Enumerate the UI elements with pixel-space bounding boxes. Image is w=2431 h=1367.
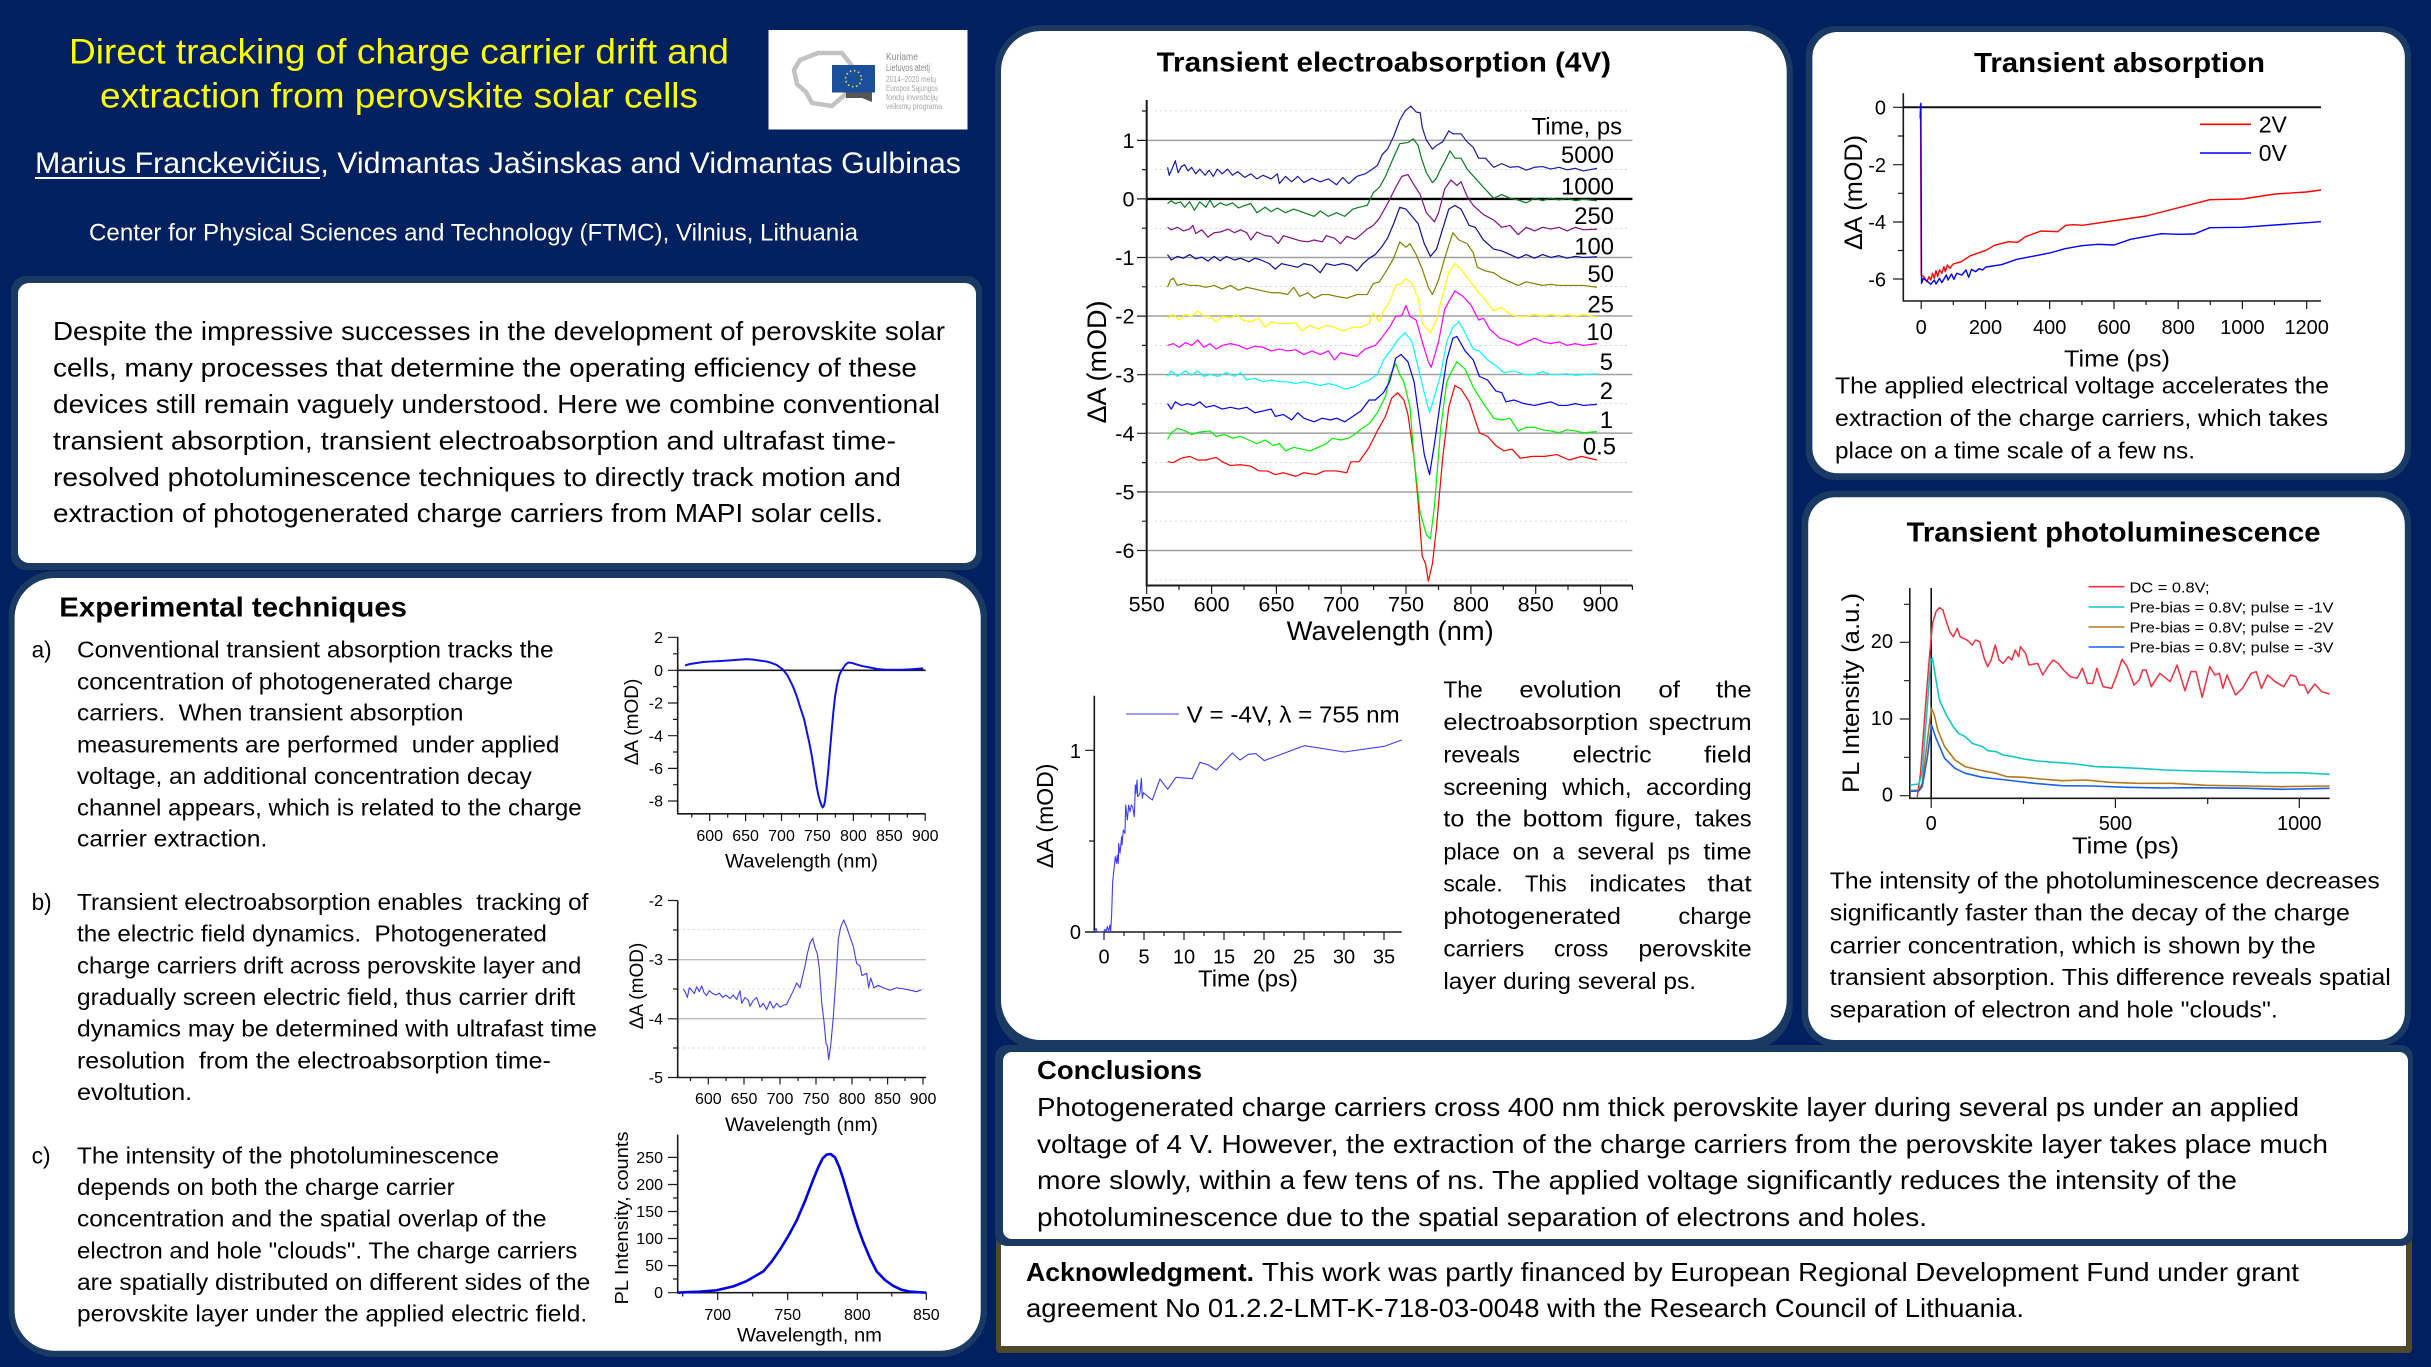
panel: introduction: extraction of photogenerated charge carriers from MAPI solar cells. [53,498,883,528]
panel: transient photoluminescence [1802,491,2411,1046]
chart: transient absorption spectrum: 800 [840,828,867,845]
panel: introduction: Despite the impressive successes in the development of perovskite solar [53,316,945,346]
text block: evolution of electroabsorption: time [1703,838,1752,864]
chart: electroabsorption spectrum: 900 [910,1091,936,1108]
chart: electroabsorption spectra vs time: 0.5 [1583,434,1616,460]
chart: electroabsorption kinetics: 0 [1098,946,1110,968]
chart: electroabsorption kinetics [1032,696,1402,992]
text block: b: gradually screen electric field, thus carrier drift [77,984,576,1010]
chart: transient absorption spectrum: -4 [649,728,663,745]
chart: transient absorption spectrum [622,630,939,873]
chart: electroabsorption spectra vs time: -6 [1115,538,1134,563]
chart: photoluminescence spectrum: PL Intensity, counts [611,1132,632,1304]
chart: photoluminescence kinetics: Pre-bias = 0.8V; pulse = -3V [2130,641,2334,657]
text block: transient absorption note: The applied electrical voltage accelerates the [1835,372,2329,398]
chart: transient absorption kinetics: -6 [1868,270,1886,292]
panel: introduction: resolved photoluminescence techniques to directly track motion and [53,462,901,492]
chart: electroabsorption spectrum: 850 [874,1091,901,1108]
chart: electroabsorption spectra vs time: -4 [1115,421,1134,446]
chart: electroabsorption spectra vs time: 100 [1574,234,1614,260]
chart: electroabsorption kinetics: V = -4V, λ = 755 nm [1187,702,1400,728]
chart: photoluminescence spectrum: 50 [645,1258,663,1275]
title: Direct tracking of charge carrier drift and [69,32,729,72]
affiliation: Center for Physical Sciences and Technology (FTMC), Vilnius, Lithuania [89,220,859,246]
chart: photoluminescence kinetics: 20 [1871,631,1893,653]
chart: electroabsorption spectra vs time: 900 [1582,592,1619,617]
chart: electroabsorption spectra vs time: 10 [1587,319,1613,346]
text block: evolution of electroabsorption: field [1704,741,1752,767]
chart: transient absorption spectrum: 850 [876,828,903,845]
chart: photoluminescence kinetics: 500 [2099,813,2132,835]
text block: evolution of electroabsorption: This [1525,871,1567,897]
text block: evolution of electroabsorption: a [1553,838,1564,864]
chart: electroabsorption spectra vs time: -1 [1115,245,1134,270]
chart: electroabsorption spectra vs time: Time, ps [1532,114,1622,140]
icon: EU funds logo [768,30,968,130]
text block: evolution of electroabsorption: that [1707,871,1752,897]
chart: electroabsorption spectra vs time: 5 [1600,349,1613,376]
chart: electroabsorption spectrum: -5 [649,1070,663,1087]
chart: photoluminescence spectrum [611,1132,940,1347]
text block: a: carrier extraction. [77,826,267,852]
chart: electroabsorption spectra vs time: 50 [1588,261,1614,288]
text block: evolution of electroabsorption: according [1646,774,1752,800]
chart: electroabsorption kinetics: Time (ps) [1198,966,1298,992]
chart: electroabsorption spectra vs time: 550 [1129,592,1165,617]
icon: EU funds logo: Kuriame [886,52,918,63]
chart: photoluminescence kinetics: Time (ps) [2072,832,2179,858]
text block: a: Conventional transient absorption tracks the [77,636,554,662]
chart: electroabsorption spectra vs time: 1 [1122,128,1134,153]
text block: c: are spatially distributed on different sides of the [77,1269,590,1295]
panel: acknowledgment: This work was partly financed by European Regional Development Fund under grant [1262,1257,2300,1287]
chart: photoluminescence kinetics: Pre-bias = 0.8V; pulse = -1V [2130,601,2334,617]
text block: evolution of electroabsorption: of [1658,676,1681,702]
text block: transient absorption note [1835,372,2329,463]
chart: electroabsorption kinetics: 35 [1373,946,1395,968]
chart: transient absorption kinetics: 400 [2033,317,2066,339]
text block: evolution of electroabsorption: bottom [1523,806,1603,832]
chart: electroabsorption spectra vs time: 1000 [1561,174,1614,200]
text block: c: The intensity of the photoluminescence [77,1142,499,1168]
text block: a: channel appears, which is related to the charge [77,795,582,821]
text block: evolution of electroabsorption: on [1513,838,1539,864]
chart: photoluminescence kinetics: Pre-bias = 0.8V; pulse = -2V [2130,621,2334,637]
text block: evolution of electroabsorption: the [1716,676,1752,702]
chart: transient absorption kinetics: 0V [2259,140,2287,166]
chart: electroabsorption spectra vs time: 800 [1453,592,1489,617]
text block: b: Transient electroabsorption enables tracking of [77,889,589,915]
text block: c: perovskite layer under the applied electric field. [77,1301,587,1327]
heading: transient photoluminescence: Transient photoluminescence [1907,517,2321,548]
chart: photoluminescence kinetics: DC = 0.8V; [2130,580,2210,596]
chart: electroabsorption spectra vs time: 650 [1258,592,1294,617]
chart: photoluminescence kinetics: 0 [1882,785,1893,807]
text block: evolution of electroabsorption: cross [1554,936,1608,962]
chart: photoluminescence kinetics: 10 [1871,708,1893,730]
panel: introduction [11,276,982,570]
chart: transient absorption spectrum: -8 [649,794,663,811]
chart: electroabsorption spectrum: -3 [649,952,663,969]
chart: electroabsorption spectrum: ΔA (mOD) [627,943,648,1029]
panel: conclusions: more slowly, within a few tens of ns. The applied voltage significantly reduces the intensity of the [1037,1165,2237,1195]
chart: electroabsorption spectrum: 800 [839,1091,865,1108]
text block: b: charge carriers drift across perovskite layer and [77,952,581,978]
text block: evolution of electroabsorption: several [1577,838,1654,864]
chart: photoluminescence spectrum: 250 [636,1150,663,1167]
text block: evolution of electroabsorption: indicates [1589,871,1686,897]
text block: evolution of electroabsorption: place [1443,838,1500,864]
chart: electroabsorption spectrum: 750 [803,1091,829,1108]
text block: evolution of electroabsorption: ps [1667,838,1690,864]
icon: EU funds logo: Europos Sąjungos [886,83,938,93]
chart: electroabsorption spectra vs time: 700 [1323,592,1359,617]
chart: electroabsorption kinetics: 0 [1070,922,1081,944]
chart: transient absorption spectrum: -6 [649,761,663,778]
chart: photoluminescence spectrum: 150 [636,1204,663,1221]
chart: photoluminescence spectrum: 850 [913,1307,940,1324]
chart: electroabsorption spectra vs time: 1 [1600,407,1613,434]
text block: evolution of electroabsorption: electric [1573,741,1652,767]
text block: transient absorption note: extraction of the charge carriers, which takes [1835,405,2328,431]
chart: transient absorption kinetics: 0 [1875,98,1886,120]
chart: transient absorption spectrum: 2 [654,630,663,647]
heading: transient absorption: Transient absorption [1974,47,2265,78]
panel: acknowledgment: agreement No 01.2.2-LMT-K-718-03-0048 with the Research Council of Lithuania. [1026,1293,2024,1323]
panel: transient electroabsorption [995,25,1793,1051]
text block: evolution of electroabsorption: which, [1561,774,1632,800]
chart: electroabsorption spectra vs time: 250 [1574,203,1614,230]
title: extraction from perovskite solar cells [100,76,698,116]
chart: electroabsorption spectra vs time: Wavelength (nm) [1287,616,1494,646]
text block: evolution of electroabsorption: reveals [1443,741,1520,767]
text block: photoluminescence note: transient absorption. This difference reveals spatial [1830,964,2391,990]
chart: electroabsorption kinetics: 1 [1070,741,1081,763]
text block: evolution of electroabsorption: layer during several ps. [1443,968,1696,994]
chart: electroabsorption spectra vs time: 5000 [1561,142,1614,169]
panel: conclusions: photoluminescence due to the spatial separation of electrons and holes. [1037,1202,1927,1232]
chart: transient absorption spectrum: 650 [732,828,759,845]
chart: photoluminescence spectrum: 800 [844,1307,871,1324]
text block: c: electron and hole "clouds". The charge carriers [77,1237,577,1263]
text block: evolution of electroabsorption: takes [1695,806,1752,832]
chart: photoluminescence kinetics: 1000 [2277,813,2322,835]
heading: experimental techniques: Experimental techniques [59,592,407,623]
chart: electroabsorption spectra vs time: 25 [1588,292,1614,319]
panel: transient absorption [1806,26,2411,480]
text block: evolution of electroabsorption: perovskite [1638,936,1752,962]
chart: photoluminescence spectrum: 750 [774,1307,801,1324]
chart: transient absorption kinetics: 600 [2097,317,2131,339]
chart: transient absorption kinetics: 2V [2259,112,2287,138]
text block: transient absorption note: place on a time scale of a few ns. [1835,437,2195,463]
chart: transient absorption spectrum: 600 [696,828,723,845]
chart: transient absorption kinetics: Time (ps) [2064,346,2170,372]
chart: electroabsorption spectra vs time: ΔA (mOD) [1082,300,1112,424]
panel: conclusions [995,1045,2413,1246]
chart: transient absorption spectrum: ΔA (mOD) [622,679,643,765]
chart: electroabsorption spectra vs time: -2 [1115,304,1134,329]
text block: evolution of electroabsorption: scale. [1443,871,1503,897]
chart: electroabsorption kinetics: ΔA (mOD) [1032,764,1058,868]
chart: photoluminescence spectrum: 0 [654,1285,663,1302]
chart: transient absorption spectrum: Wavelength (nm) [725,852,878,873]
chart: photoluminescence kinetics: 0 [1926,813,1937,835]
chart: electroabsorption kinetics: 30 [1333,946,1355,968]
chart: transient absorption kinetics: 800 [2162,317,2195,339]
text block: c: depends on both the charge carrier [77,1174,455,1200]
text block: b [32,889,597,1105]
icon: EU funds logo: veiksmų programa [886,101,942,111]
chart: electroabsorption spectra vs time: 0 [1122,186,1134,212]
text block: a: a) [32,636,52,662]
text block: evolution of electroabsorption: electroabsorption [1443,709,1638,735]
text block: b: resolution from the electroabsorption time- [77,1047,551,1073]
text block: photoluminescence note: significantly faster than the decay of the charge [1830,900,2350,926]
text block: evolution of electroabsorption [1443,676,1752,994]
chart: photoluminescence kinetics [1838,580,2334,858]
text block: b: b) [32,889,52,915]
icon: EU funds logo: 2014–2020 metų [886,74,936,84]
chart: photoluminescence spectrum: 700 [704,1307,731,1324]
chart: electroabsorption spectrum: -2 [649,893,663,910]
chart: electroabsorption spectrum: 700 [767,1091,793,1108]
panel: acknowledgment [996,1238,2412,1353]
panel: introduction: cells, many processes that determine the operating efficiency of these [53,352,917,382]
text block: evolution of electroabsorption: carriers [1443,936,1524,962]
chart: transient absorption kinetics: -2 [1868,155,1886,177]
chart: electroabsorption spectrum: Wavelength (nm) [725,1115,878,1136]
chart: transient absorption kinetics: -4 [1868,212,1886,234]
text block: evolution of electroabsorption: screening [1443,774,1548,800]
text block: evolution of electroabsorption: to [1443,806,1464,832]
chart: transient absorption kinetics: 200 [1969,317,2002,339]
text block: a: voltage, an additional concentration decay [77,763,532,789]
chart: transient absorption kinetics [1840,93,2329,372]
chart: transient absorption kinetics: ΔA (mOD) [1840,135,1868,250]
chart: photoluminescence spectrum: 100 [636,1231,663,1248]
chart: electroabsorption spectrum: 600 [695,1091,722,1108]
chart: transient absorption spectrum: 700 [768,828,795,845]
icon: EU funds logo: Lietuvos ateitį [886,63,930,74]
chart: transient absorption spectrum: -2 [649,696,663,713]
chart: electroabsorption spectrum [627,893,936,1136]
text block: evolution of electroabsorption: charge [1678,903,1752,929]
text block: a: measurements are performed under applied [77,731,560,757]
chart: photoluminescence kinetics: PL Intensity (a.u.) [1838,593,1865,793]
chart: transient absorption spectrum: 750 [804,828,831,845]
text block: evolution of electroabsorption: evolution [1519,676,1622,702]
panel: introduction: transient absorption, transient electroabsorption and ultrafast time- [53,426,896,456]
chart: electroabsorption spectrum: 650 [731,1091,757,1108]
text block: photoluminescence note: separation of electron and hole "clouds". [1830,997,2278,1023]
panel: conclusions: Conclusions [1037,1055,1202,1085]
chart: electroabsorption spectra vs time: 750 [1388,592,1424,617]
chart: electroabsorption spectra vs time: -5 [1115,480,1134,504]
chart: photoluminescence spectrum: Wavelength, nm [737,1326,882,1347]
text block: c: concentration and the spatial overlap of the [77,1206,546,1232]
panel: acknowledgment: Acknowledgment. [1026,1257,1254,1287]
chart: transient absorption kinetics: 0 [1916,317,1927,339]
text block: c [32,1142,590,1327]
text block: evolution of electroabsorption: photogenerated [1443,903,1621,929]
text block: c: c) [32,1142,51,1168]
chart: electroabsorption kinetics: 15 [1213,946,1235,968]
chart: electroabsorption spectra vs time [1082,100,1632,646]
title [69,32,729,116]
chart: transient absorption kinetics: 1000 [2220,317,2265,339]
chart: electroabsorption kinetics: 25 [1293,946,1315,968]
panel: conclusions: Photogenerated charge carriers cross 400 nm thick perovskite layer during several ps under an applied [1037,1092,2299,1122]
chart: electroabsorption spectra vs time: -3 [1115,362,1134,387]
text block: a [32,636,582,852]
text block: b: evoltution. [77,1079,192,1105]
text block: a: carriers. When transient absorption [77,700,463,726]
text block: evolution of electroabsorption: The [1443,676,1483,702]
chart: transient absorption spectrum: 0 [654,663,663,680]
icon: EU funds logo: fondų investicijų [886,92,938,102]
text block: photoluminescence note: The intensity of the photoluminescence decreases [1830,867,2380,893]
text block: evolution of electroabsorption: the [1476,806,1512,832]
text block: a: concentration of photogenerated charge [77,668,513,694]
text block: photoluminescence note: carrier concentration, which is shown by the [1830,932,2316,958]
chart: electroabsorption spectrum: -4 [649,1011,663,1028]
chart: electroabsorption kinetics: 20 [1253,946,1275,968]
chart: transient absorption kinetics: 1200 [2284,317,2329,339]
panel: experimental techniques [9,571,987,1357]
text block: photoluminescence note [1830,867,2391,1023]
heading: transient electroabsorption: Transient electroabsorption (4V) [1157,46,1611,78]
chart: electroabsorption spectra vs time: 2 [1600,378,1613,405]
panel: introduction: devices still remain vaguely understood. Here we combine conventional [53,389,940,419]
text block: evolution of electroabsorption: figure, [1615,806,1682,832]
chart: electroabsorption spectra vs time: 600 [1194,592,1230,617]
chart: transient absorption spectrum: 900 [912,828,939,845]
chart: electroabsorption kinetics: 10 [1173,946,1195,968]
text block: b: the electric field dynamics. Photogenerated [77,921,547,947]
chart: electroabsorption kinetics: 5 [1138,946,1150,968]
text block: evolution of electroabsorption: spectrum [1649,709,1752,735]
chart: photoluminescence spectrum: 200 [636,1177,663,1194]
authors: Marius Franckevičius, Vidmantas Jašinskas and Vidmantas Gulbinas [35,147,961,180]
chart: electroabsorption spectra vs time: 850 [1518,592,1554,617]
text block: b: dynamics may be determined with ultrafast time [77,1016,597,1042]
panel: conclusions: voltage of 4 V. However, the extraction of the charge carriers from the perovskite layer takes place much [1037,1129,2328,1159]
